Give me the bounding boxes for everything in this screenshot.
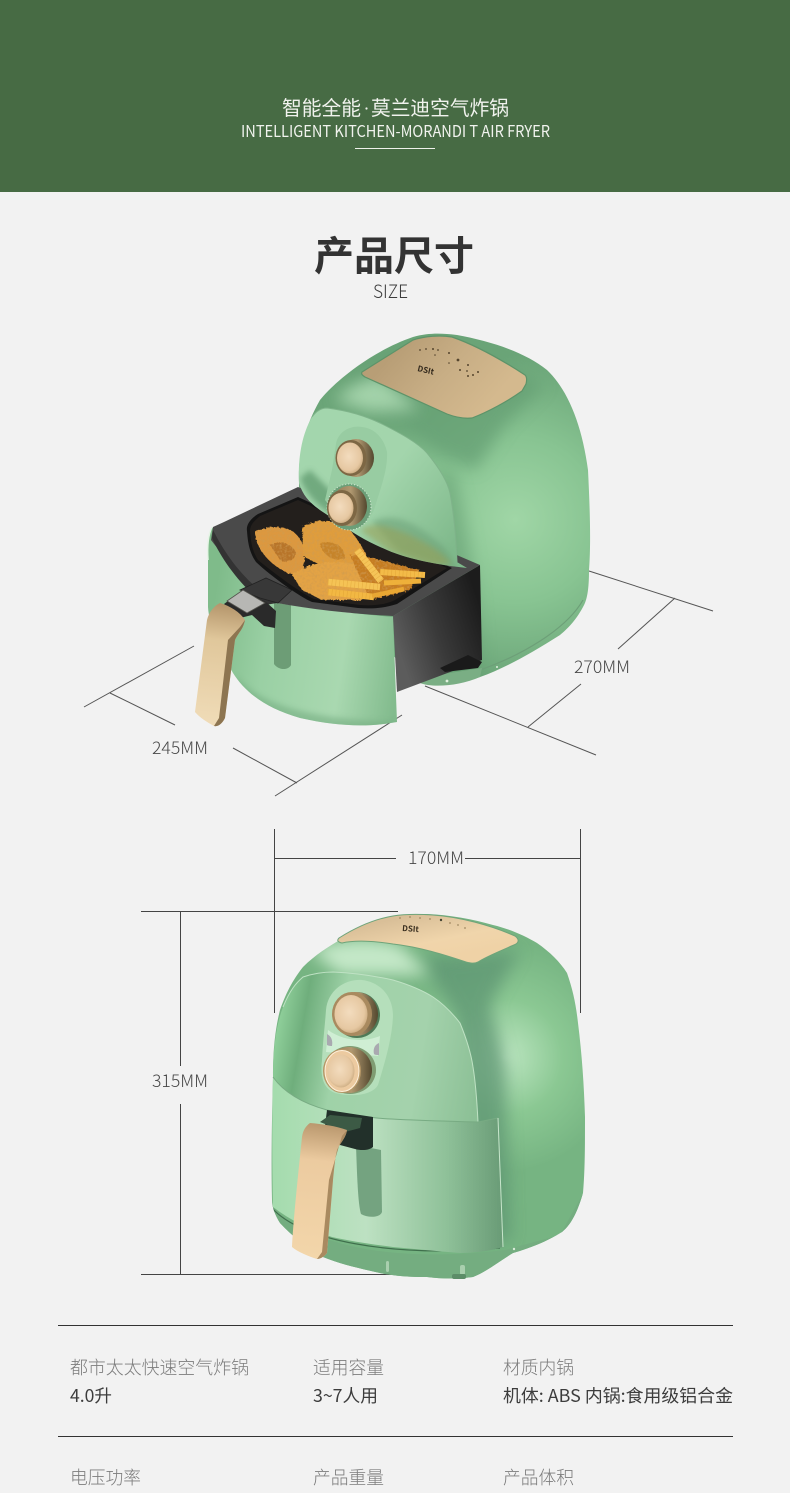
panel touch dots bbox=[399, 916, 466, 929]
spec: voltage power: 电压功率 bbox=[70, 1464, 141, 1490]
bottom knob bbox=[323, 1046, 376, 1094]
drawer rim latch bbox=[240, 578, 292, 603]
dimension lines: closed fryer bbox=[141, 829, 580, 1274]
bottom knob bbox=[327, 484, 371, 530]
panel logo: DSIt bbox=[416, 363, 436, 378]
mode indicators bbox=[327, 1034, 332, 1046]
spec: volume: 产品体积 bbox=[503, 1464, 574, 1490]
drawer handle clasp bbox=[224, 590, 276, 628]
dimension label: 245MM: 245MM bbox=[152, 734, 208, 759]
spec: weight: 产品重量 bbox=[313, 1464, 384, 1490]
french fries bbox=[328, 550, 425, 597]
illustration: air fryer with drawer open bbox=[195, 334, 590, 730]
body shading bbox=[420, 950, 520, 1240]
drawer slot bbox=[356, 1145, 382, 1217]
header title English: INTELLIGENT KITCHEN-MORANDI T AIR FRYER bbox=[241, 118, 550, 142]
control panel bbox=[362, 336, 527, 418]
panel touch dots bbox=[419, 348, 479, 377]
handle clasp bbox=[325, 1110, 373, 1150]
mode indicators right bbox=[374, 1043, 379, 1055]
drawer handle bbox=[292, 1123, 347, 1259]
dimension label: 270MM: 270MM bbox=[574, 653, 630, 678]
spec: capacity: 都市太太快速空气炸锅 bbox=[70, 1354, 249, 1380]
fryer body bbox=[299, 334, 590, 690]
spec: material bbox=[503, 1354, 733, 1408]
spec: servings: 3~7人用 bbox=[313, 1383, 378, 1408]
fry basket bbox=[247, 497, 452, 608]
front cover bbox=[273, 972, 478, 1122]
top knob bbox=[336, 439, 374, 477]
spec: capacity: 4.0升 bbox=[70, 1383, 112, 1408]
food reflection bbox=[373, 516, 453, 566]
dimension lines: open fryer bbox=[84, 571, 713, 796]
knob plate gap light bbox=[326, 1030, 380, 1056]
panel logo: DSIt bbox=[402, 923, 420, 935]
control panel bbox=[338, 914, 518, 963]
header title Chinese: 智能全能 bbox=[282, 92, 361, 121]
fried food bbox=[255, 521, 425, 600]
front cover bbox=[299, 408, 467, 570]
illustration: air fryer closed, front view bbox=[260, 914, 590, 1290]
handle clasp top bbox=[320, 1115, 362, 1132]
dimension label: 170MM: 170MM bbox=[408, 844, 464, 869]
base feet bbox=[420, 668, 482, 686]
dimension label: 315MM: 315MM bbox=[152, 1067, 208, 1092]
header title Chinese: 莫兰迪空气炸锅 bbox=[371, 92, 509, 121]
top knob bbox=[332, 992, 380, 1038]
fryer body bbox=[260, 914, 590, 1290]
spec: material: 材质内锅 bbox=[503, 1354, 574, 1380]
spec table bbox=[58, 1325, 733, 1490]
heading subtitle: SIZE bbox=[373, 278, 408, 304]
drawer handle bbox=[195, 603, 245, 726]
spec: material: 机体: ABS 内锅:食用级铝合金 bbox=[503, 1383, 733, 1408]
knob plate bbox=[322, 980, 393, 1095]
header title Chinese bbox=[282, 92, 509, 121]
header underline bbox=[355, 148, 435, 149]
spec: capacity bbox=[70, 1354, 249, 1408]
drawer rim bbox=[211, 487, 480, 616]
header banner bbox=[0, 0, 790, 192]
drawer side (black) bbox=[393, 565, 482, 692]
drawer front bbox=[272, 1077, 503, 1253]
knob plate bbox=[325, 427, 387, 527]
fried chicken bbox=[255, 521, 420, 600]
spec: servings: 适用容量 bbox=[313, 1354, 384, 1380]
drawer lower interior bbox=[440, 655, 482, 672]
spec: servings bbox=[313, 1354, 384, 1408]
drawer front bbox=[208, 527, 397, 730]
heading: product size: 产品尺寸 bbox=[314, 224, 474, 282]
